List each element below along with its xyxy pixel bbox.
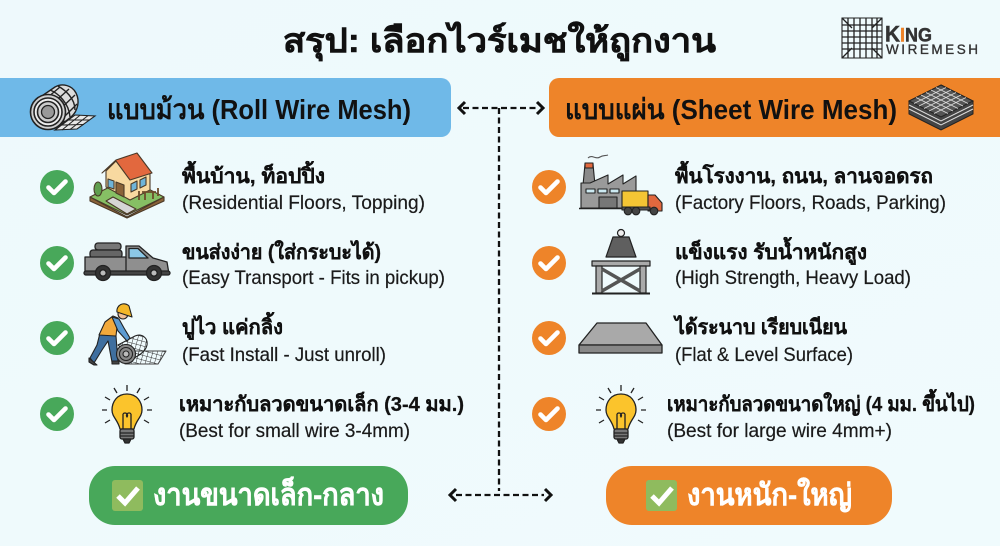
badge: small-medium jobs: งานขนาดเล็ก-กลาง xyxy=(153,476,384,512)
text 3: ได้ระนาบ เรียบเนียน xyxy=(673,315,847,339)
text 2 xyxy=(675,236,911,289)
text 4 xyxy=(179,390,464,442)
title: สรุป: เลือกไวร์เมชให้ถูกงาน xyxy=(283,21,716,62)
text 2: (High Strength, Heavy Load) xyxy=(675,267,911,289)
text 1: (Factory Floors, Roads, Parking) xyxy=(675,192,946,214)
badge: heavy-large jobs: งานหนัก-ใหญ่ xyxy=(687,477,852,513)
text 1: พื้นบ้าน, ท็อปปิ้ง xyxy=(182,160,325,188)
check 3 xyxy=(532,321,566,355)
text 1: พื้นโรงงาน, ถนน, ลานจอดรถ xyxy=(675,160,933,188)
text 1: (Residential Floors, Topping) xyxy=(182,192,425,214)
text 4: (Best for large wire 4mm+) xyxy=(667,420,892,442)
text 1 xyxy=(182,160,425,214)
panel header: sheet wire mesh xyxy=(549,78,1000,137)
header text: แบบม้วน (Roll Wire Mesh) xyxy=(107,94,411,125)
panel header: roll wire mesh xyxy=(0,78,451,137)
logo: King Wiremesh xyxy=(842,18,978,58)
text 2: แข็งแรง รับน้ำหนักสูง xyxy=(675,236,867,266)
text 2: (Easy Transport - Fits in pickup) xyxy=(182,267,445,289)
badge: small-medium jobs xyxy=(89,466,408,525)
check 3 xyxy=(40,321,74,355)
text 3 xyxy=(182,311,386,366)
header text: แบบแผ่น (Sheet Wire Mesh) xyxy=(565,94,897,125)
right list xyxy=(532,155,975,443)
icon: light bulb xyxy=(102,385,152,443)
icon: light bulb xyxy=(596,385,646,443)
connector arrows xyxy=(450,102,551,501)
icon: pickup truck xyxy=(84,243,170,280)
logo: King Wiremesh: WIREMESH xyxy=(886,42,978,57)
text 1 xyxy=(675,160,946,214)
check 4 xyxy=(40,397,74,431)
check 2 xyxy=(532,246,566,280)
check 4 xyxy=(532,397,566,431)
text 3: ปูไว แค่กลิ้ง xyxy=(182,311,283,341)
text 3 xyxy=(673,315,853,366)
icon: mesh sheets xyxy=(909,85,973,130)
logo: King Wiremesh: KING xyxy=(885,22,932,46)
text 4 xyxy=(667,388,975,442)
icon: worker unrolling mesh xyxy=(89,304,166,365)
icon: factory and truck xyxy=(579,155,662,215)
left list xyxy=(40,153,464,443)
text 4: เหมาะกับลวดขนาดใหญ่ (4 มม. ขึ้นไป) xyxy=(667,388,975,416)
check 1 xyxy=(532,170,566,204)
text 4: เหมาะกับลวดขนาดเล็ก (3-4 มม.) xyxy=(179,390,464,416)
check 2 xyxy=(40,246,74,280)
text 3: (Fast Install - Just unroll) xyxy=(182,344,386,366)
icon: flat slab xyxy=(579,323,662,353)
text 4: (Best for small wire 3-4mm) xyxy=(179,420,410,442)
text 3: (Flat & Level Surface) xyxy=(675,344,853,366)
text 2: ขนส่งง่าย (ใส่กระบะได้) xyxy=(182,240,381,264)
icon: house xyxy=(90,153,164,218)
check 1 xyxy=(40,170,74,204)
icon: weight on stand xyxy=(592,230,650,294)
icon: mesh roll xyxy=(30,85,95,130)
text 2 xyxy=(182,240,445,289)
badge: heavy-large jobs xyxy=(606,466,892,525)
